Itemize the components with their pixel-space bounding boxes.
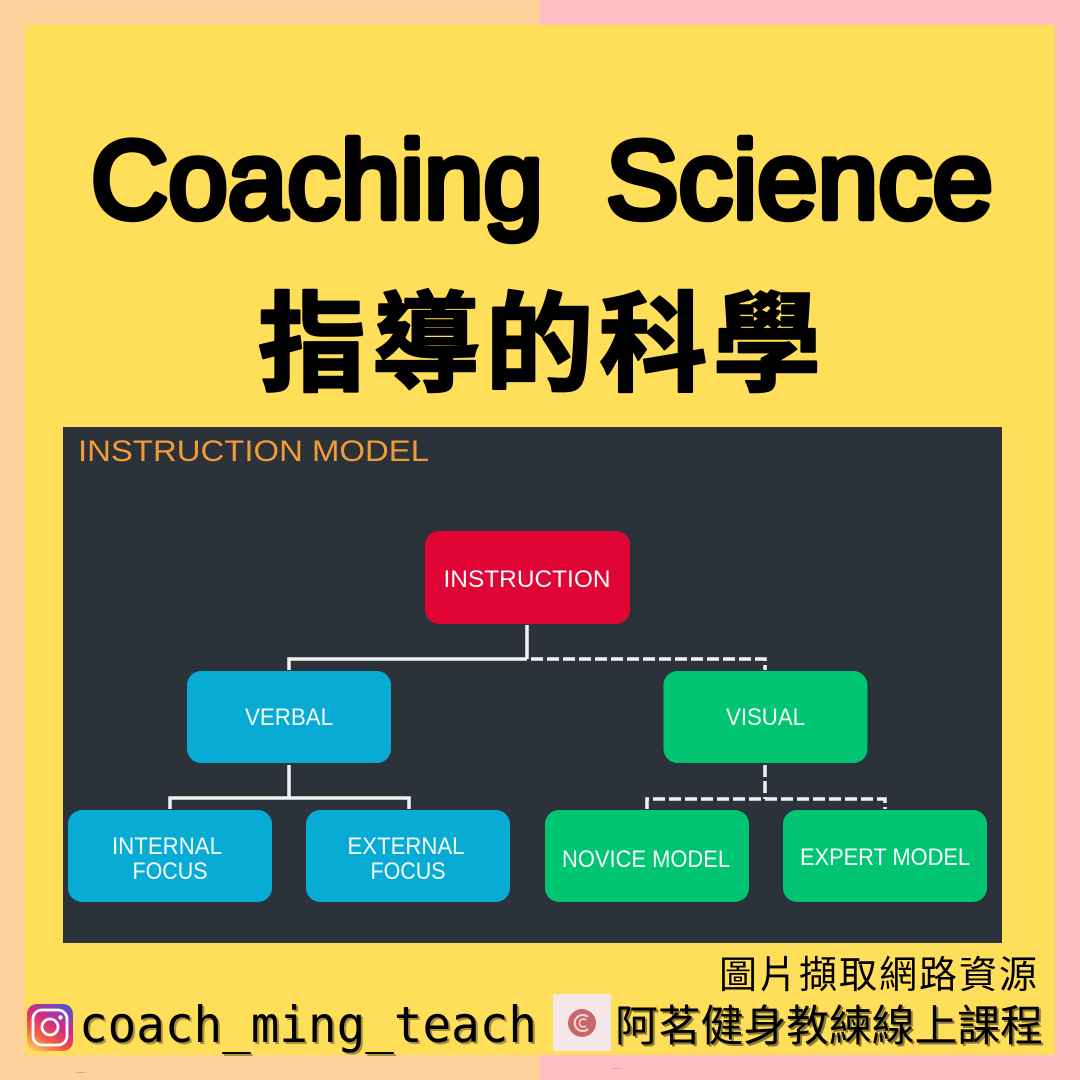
panel background [63, 427, 1002, 943]
background: left peach half [0, 0, 540, 1080]
box: verbal [187, 671, 391, 763]
connectors: instruction to visual (dashed) [531, 659, 765, 670]
course name: 阿茗健身教練線上課程 [615, 1003, 1043, 1051]
box: instruction [425, 531, 630, 624]
box: novice model: NOVICE MODEL [562, 846, 730, 873]
box: visual [664, 671, 868, 763]
box: verbal: VERBAL [245, 704, 333, 731]
box: novice model [545, 810, 749, 902]
box: internal focus [68, 810, 272, 902]
title: English: Science [606, 119, 993, 242]
background: right pink half [540, 0, 1080, 1080]
box: external focus: FOCUS [370, 858, 446, 885]
instagram handle: coach_ming_teach [81, 998, 539, 1056]
image source note: 圖片擷取網路資源 [719, 955, 1037, 997]
title: English [91, 119, 993, 242]
small mark: left [76, 1072, 85, 1073]
box: instruction: INSTRUCTION [444, 566, 610, 593]
logo: course channel [553, 994, 611, 1051]
box: expert model: EXPERT MODEL [800, 844, 970, 871]
box: internal focus: INTERNAL [112, 833, 222, 860]
title: Chinese: 指導的科學 [258, 284, 821, 405]
box: internal focus: FOCUS [132, 858, 208, 885]
box: visual: VISUAL [726, 704, 805, 731]
course name: 阿茗健身教練線上課程 [617, 1005, 1045, 1053]
title: English: Coaching [91, 119, 543, 242]
panel: instruction model diagram [63, 427, 1002, 943]
connectors: instruction to verbal (solid) [289, 625, 527, 670]
connectors: verbal to focus boxes (solid) [170, 765, 409, 809]
small mark: right [612, 1068, 621, 1069]
icon: instagram [27, 1004, 73, 1051]
connectors: visual to model boxes (dashed) [647, 765, 885, 809]
box: external focus [306, 810, 510, 902]
box: expert model [783, 810, 987, 902]
box: external focus: EXTERNAL [348, 833, 464, 860]
panel heading: INSTRUCTION MODEL [78, 435, 429, 468]
instagram handle: coach_ming_teach [79, 996, 537, 1054]
